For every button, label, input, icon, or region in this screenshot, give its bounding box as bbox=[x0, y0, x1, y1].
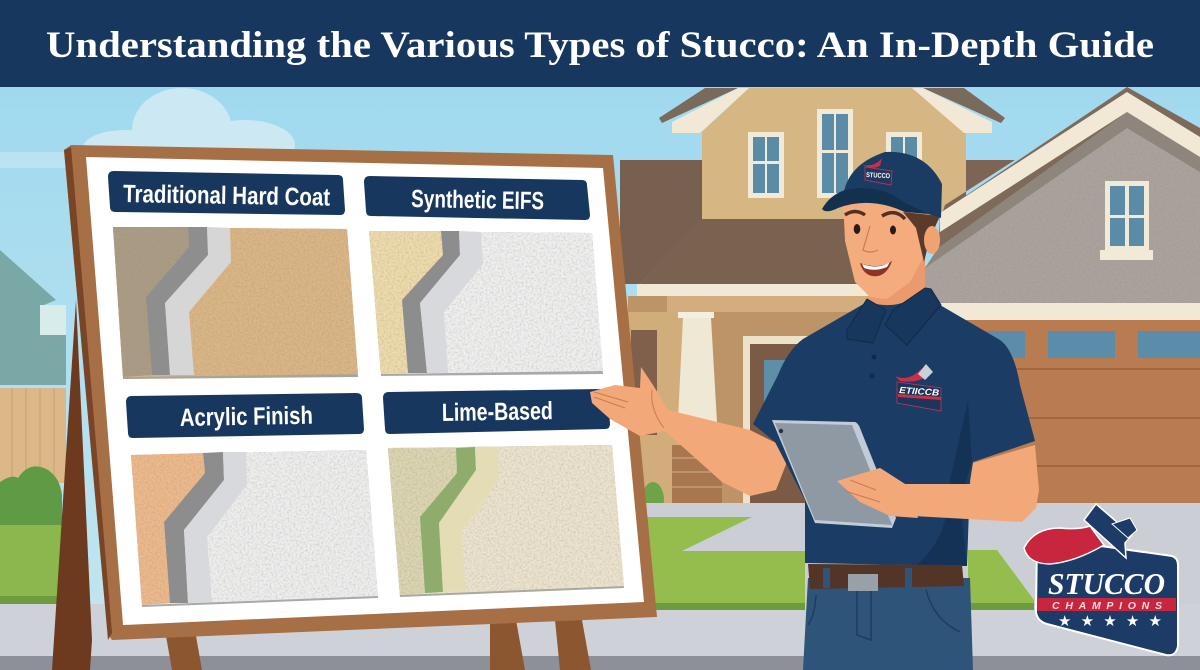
neck bbox=[868, 255, 925, 305]
logo swoosh bbox=[1024, 526, 1104, 564]
easel and board bbox=[52, 145, 657, 670]
left lawn bbox=[0, 525, 70, 605]
logo stars: ★★★★★ bbox=[1058, 612, 1162, 630]
driveway bbox=[640, 503, 1200, 613]
swatch: acrylic layers bbox=[131, 450, 378, 607]
garage bbox=[930, 303, 1200, 504]
polo shirt bbox=[753, 290, 1035, 566]
label: lime-based bbox=[383, 389, 610, 434]
easel legs bbox=[52, 300, 591, 670]
cap badge: STUCCO bbox=[866, 172, 891, 180]
lawn bbox=[645, 517, 1034, 610]
porch column bbox=[677, 312, 718, 440]
logo: Stucco Champions bbox=[1024, 504, 1178, 655]
label: traditional hard coat: Traditional Hard Coat bbox=[123, 180, 331, 212]
label: lime-based: Lime-Based bbox=[442, 397, 553, 427]
wooden fence bbox=[0, 388, 66, 483]
logo subtitle: CHAMPIONS bbox=[1052, 600, 1162, 612]
gable window bbox=[1100, 181, 1153, 260]
brick base bbox=[672, 445, 722, 503]
holding arm bbox=[837, 445, 1039, 522]
lower storey wall bbox=[628, 296, 948, 504]
title: Understanding the Various Types of Stucco: An In-Depth Guide bbox=[46, 25, 1154, 66]
label: acrylic finish bbox=[126, 393, 364, 438]
belt bbox=[808, 564, 964, 591]
hedge bbox=[0, 466, 62, 526]
neighbouring teal house bbox=[0, 250, 66, 385]
label: synthetic EIFS: Synthetic EIFS bbox=[411, 185, 544, 215]
logo shield bbox=[1036, 537, 1178, 655]
fingers on tablet bbox=[837, 468, 918, 518]
upper windows bbox=[748, 109, 922, 198]
panel: traditional hard coat bbox=[108, 171, 358, 379]
hair bbox=[903, 212, 940, 262]
shirt buttons bbox=[870, 354, 876, 378]
sleeve shading bbox=[915, 400, 972, 566]
rear roof bbox=[620, 160, 702, 284]
upper storey wall bbox=[702, 88, 966, 220]
clouds bbox=[0, 88, 300, 172]
chest logo bbox=[895, 364, 941, 411]
front door bbox=[743, 336, 813, 504]
swatch: EIFS layers bbox=[369, 231, 603, 376]
label: traditional hard coat bbox=[108, 171, 345, 215]
panel: synthetic EIFS bbox=[364, 176, 603, 376]
logo wordmark: STUCCO bbox=[1048, 566, 1165, 601]
sidewalk and street bbox=[0, 603, 1200, 670]
rear right roof bbox=[940, 160, 1015, 220]
technician bbox=[590, 152, 1039, 670]
swatch: lime layers bbox=[388, 445, 624, 597]
chest logo: ETIICCB bbox=[899, 385, 940, 398]
label: synthetic EIFS bbox=[364, 176, 590, 220]
red band bbox=[1037, 598, 1176, 611]
pointing arm and hand bbox=[590, 367, 787, 496]
shutter bbox=[631, 330, 657, 435]
eyes bbox=[854, 224, 896, 234]
board surface bbox=[86, 157, 644, 625]
swatch: traditional layers bbox=[113, 227, 358, 379]
porch roof bbox=[640, 219, 900, 284]
shrub bbox=[642, 482, 664, 518]
collar bbox=[847, 288, 941, 345]
cap bbox=[822, 152, 942, 218]
logo trowel bbox=[1084, 504, 1137, 558]
title banner bbox=[0, 0, 1200, 87]
trousers bbox=[803, 578, 973, 670]
eyebrows bbox=[845, 212, 905, 219]
board frame bbox=[64, 145, 657, 640]
tablet bbox=[772, 420, 896, 528]
nose bbox=[863, 226, 878, 252]
smile bbox=[860, 261, 892, 276]
ear bbox=[924, 226, 940, 254]
label: acrylic finish: Acrylic Finish bbox=[180, 402, 313, 432]
panel: acrylic finish bbox=[126, 393, 378, 607]
right gable bbox=[923, 87, 1200, 304]
upper roof and trim bbox=[659, 88, 1005, 133]
face bbox=[843, 198, 940, 299]
panel: lime-based bbox=[383, 389, 624, 597]
